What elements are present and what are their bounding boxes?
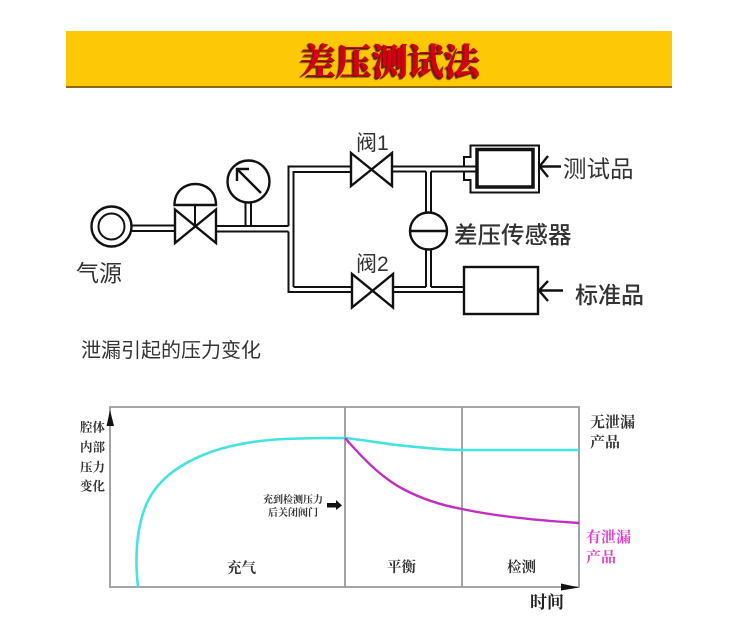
icon: regulator valve [174,184,216,243]
chart frame and phase dividers [110,407,579,587]
icon: valve 2 [352,274,393,308]
label: leaking product: 产品 [586,549,616,566]
arrow: x axis [561,584,579,590]
label: air source: 气源 [76,260,122,286]
pipes: valves to chambers and sensor [392,166,464,292]
label: detect phase: 检测 [507,558,536,576]
curve: leaking product [345,438,579,523]
label: fill phase: 充气 [227,559,256,577]
label: y axis [80,420,106,494]
label: valve 1: 阀1 [356,132,389,155]
label: valve 2: 阀2 [356,253,389,276]
label: y axis: 内部 [80,440,106,454]
icon: test chamber [464,146,539,192]
curve: no leak product [137,438,579,587]
pipe: source to regulator [132,226,175,231]
label: standard item: 标准品 [575,282,644,308]
title: 差压测试法 [300,42,480,82]
icon: differential pressure sensor [410,212,447,250]
callout: fill to test pressure: 充到检测压力 [263,493,323,506]
label: no leak product: 无泄漏 [590,413,635,431]
label: x axis time: 时间 [530,593,564,612]
label: leaking product: 有泄漏 [586,528,631,546]
icon: standard chamber [464,267,538,314]
label: leaking product [586,528,631,566]
chart heading: 泄漏引起的压力变化 [81,339,261,362]
pipe: regulator to branch [216,226,288,232]
label: differential pressure sensor: 差压传感器 [454,222,572,248]
icon: air source [92,206,132,246]
label: stabilise phase: 平衡 [387,559,416,576]
label: no leak product: 产品 [590,434,620,451]
arrow: test item [540,156,561,177]
arrow: standard item [539,281,563,301]
label: y axis: 变化 [80,478,106,494]
pneumatic circuit diagram [76,132,644,314]
icon: pressure gauge [228,160,270,226]
callout: fill to test pressure [263,493,342,519]
pipe: branch manifold [288,166,352,292]
label: y axis: 腔体 [80,420,106,434]
label: test item: 测试品 [563,156,634,182]
label: no leak product [590,413,635,451]
label: y axis: 压力 [80,460,105,474]
arrow: y axis [106,410,114,426]
callout: fill to test pressure: 后关闭阀门 [268,506,318,519]
pressure change line chart [80,407,635,612]
icon: valve 1 [351,153,392,186]
title banner [66,31,672,88]
